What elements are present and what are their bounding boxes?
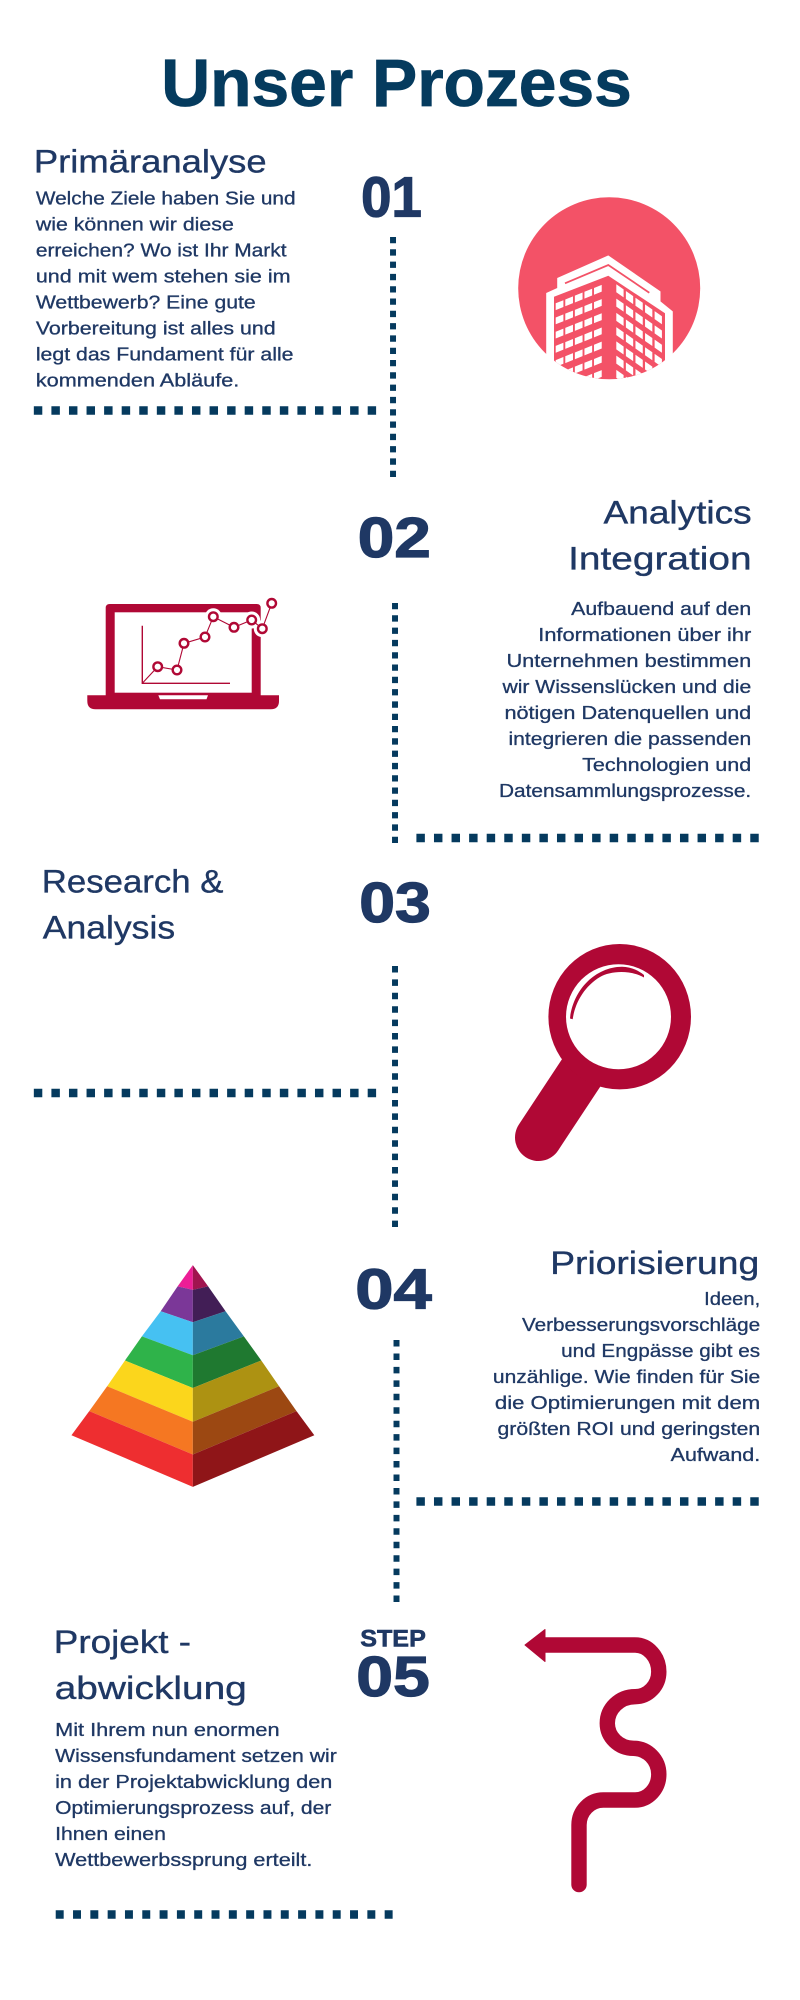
step 1 body text: Wettbewerb? Eine gute [36,291,256,312]
step 2 body text: Aufbauend auf den [571,598,751,619]
step 1 body text: Vorbereitung ist alles und [36,317,276,338]
step 1 body text: Welche Ziele haben Sie und [36,187,296,208]
step 4 body text: die Optimierungen mit dem [495,1392,760,1413]
step 5 body text: Optimierungsprozess auf, der [55,1797,331,1818]
step 4 body text: unzählige. Wie finden für Sie [493,1366,760,1387]
step 2 heading [568,494,752,577]
step 5 body text: Wettbewerbssprung erteilt. [55,1849,312,1870]
step 2 body text: nötigen Datenquellen und [504,702,751,723]
step 4 body text: Verbesserungsvorschläge [522,1314,760,1335]
step 5 heading: abwicklung [55,1670,247,1706]
step 2 body text: Technologien und [582,754,751,775]
icon: office building in red circle [518,197,700,380]
step 3 heading: Analysis [43,910,175,946]
step 2 body text: Unternehmen bestimmen [506,650,751,671]
step 1 body text: kommenden Abläufe. [36,369,239,390]
step 3 heading: Research & [42,864,223,900]
step 1 heading: Primäranalyse [34,143,267,180]
step 1 body text: wie können wir diese [35,213,234,234]
step 4 heading: Priorisierung [550,1245,759,1281]
step 4 body text: Ideen, [704,1288,760,1309]
icon: laptop with line chart [87,599,279,709]
step 4 body text [493,1288,760,1465]
number 04: 04 [355,1258,432,1322]
step 2 heading: Integration [568,541,752,577]
step 4 body text: und Engpässe gibt es [561,1340,760,1361]
number 01: 01 [361,166,422,230]
step 2 body text [499,598,751,801]
step 2 body text: Informationen über ihr [538,624,751,645]
number 03: 03 [359,872,431,935]
step 5 heading [54,1624,247,1706]
step 2 body text: integrieren die passenden [508,728,751,749]
step 5 body text: Wissensfundament setzen wir [55,1745,337,1766]
step label: STEP [360,1626,426,1653]
step 1 body text: legt das Fundament für alle [36,343,294,364]
step 1 body text: erreichen? Wo ist Ihr Markt [36,239,287,260]
number 02: 02 [358,507,431,570]
step 1 body text [35,187,296,390]
step 4 body text: größten ROI und geringsten [497,1418,760,1439]
step 1 body text: und mit wem stehen sie im [36,265,291,286]
step 5 body text: Mit Ihrem nun enormen [55,1719,280,1740]
step 5 body text: in der Projektabwicklung den [55,1771,332,1792]
step 5 body text [55,1719,337,1870]
step 2 body text: wir Wissenslücken und die [501,676,751,697]
step 5 body text: Ihnen einen [55,1823,166,1844]
icon: winding arrow [525,1630,659,1885]
step 4 body text: Aufwand. [671,1444,760,1465]
step 5 heading: Projekt - [54,1624,191,1660]
step 2 body text: Datensammlungsprozesse. [499,780,751,801]
step 2 heading: Analytics [604,494,752,530]
title: Unser Prozess [161,47,632,121]
icon: layered rainbow pyramid [71,1265,314,1487]
step 3 heading [42,864,223,946]
number 05: 05 [356,1646,430,1709]
icon: magnifying glass [538,944,691,1138]
